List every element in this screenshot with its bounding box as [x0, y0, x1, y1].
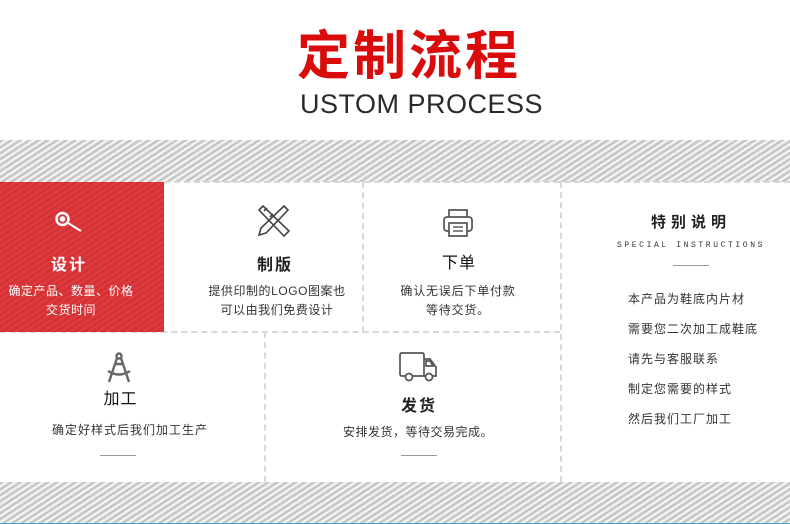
text: plate making description: 提供印制的LOGO图案也: [208, 284, 346, 298]
subheading: english: SPECIAL INSTRUCTIONS: [617, 241, 765, 250]
panel: design step: [0, 182, 164, 332]
divider line: [401, 455, 437, 456]
divider line: [673, 265, 709, 266]
text: order description: 确认无误后下单付款: [400, 284, 516, 298]
list of instructions: 需要您二次加工成鞋底: [628, 322, 758, 336]
heading: processing: 加工: [103, 391, 138, 408]
bottom edge line: [0, 523, 790, 524]
text: design description: [8, 284, 134, 316]
subtitle: USTOM PROCESS: [300, 89, 543, 119]
text: order description: 等待交货。: [426, 302, 490, 316]
striped band: top: [0, 140, 790, 182]
list of instructions: 本产品为鞋底内片材: [628, 292, 745, 306]
icon: printer: [443, 209, 473, 237]
panel: special instructions: [617, 214, 765, 426]
text: plate making description: [208, 284, 346, 316]
divider line: [100, 455, 136, 456]
heading: shipping: 发货: [401, 398, 437, 415]
icon: truck: [399, 352, 437, 382]
list of instructions: 制定您需要的样式: [628, 382, 732, 396]
icon: compass: [107, 352, 130, 382]
heading: special instructions: 特别说明: [651, 214, 731, 231]
text: order description: [400, 284, 516, 316]
heading: design: 设计: [51, 257, 87, 274]
heading: plate making: 制版: [257, 257, 293, 274]
list of instructions: 然后我们工厂加工: [628, 412, 732, 426]
text: processing description: 确定好样式后我们加工生产: [52, 423, 208, 437]
striped band: bottom: [0, 482, 790, 523]
panel: shipping step: [343, 352, 493, 456]
panel: processing step: [52, 352, 208, 456]
list of instructions: [628, 292, 758, 426]
icon: crossed pencil and ruler: [258, 205, 290, 237]
text: design description: 交货时间: [46, 302, 96, 316]
title: 定制流程: [297, 27, 521, 86]
text: design description: 确定产品、数量、价格: [8, 284, 134, 298]
panel: order step: [400, 209, 516, 316]
text: plate making description: 可以由我们免费设计: [221, 302, 333, 316]
text: shipping description: 安排发货，等待交易完成。: [343, 425, 493, 439]
list of instructions: 请先与客服联系: [628, 352, 719, 366]
icon: magnifier: [55, 212, 82, 232]
panel: plate making step: [208, 205, 346, 316]
heading: order: 下单: [442, 255, 476, 272]
